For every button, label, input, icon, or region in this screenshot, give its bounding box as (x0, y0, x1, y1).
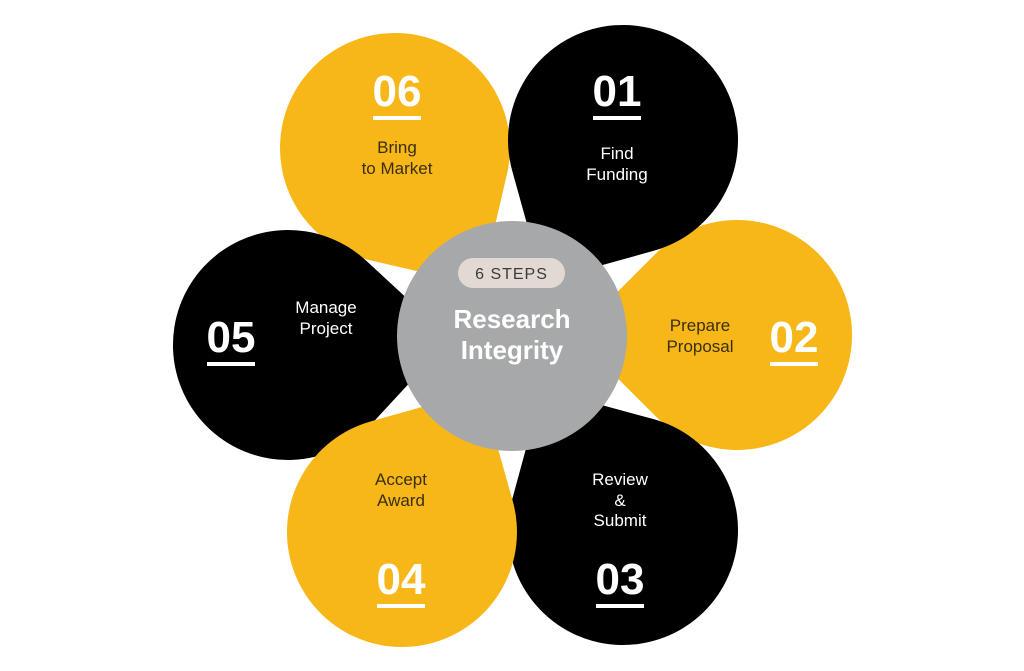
step 04: Award (377, 491, 425, 510)
petal 02 (574, 220, 852, 450)
step 03: & (614, 491, 626, 510)
step 06: to Market (362, 159, 433, 178)
petal 06 (237, 0, 579, 347)
step 01: Funding (586, 165, 648, 184)
step 04 (375, 470, 427, 608)
step 04: 04 (377, 555, 426, 604)
step 05: Project (300, 319, 353, 338)
step 03 (592, 470, 649, 608)
step 06 (362, 67, 433, 178)
center title: Integrity (461, 335, 564, 365)
step 03: Review (592, 470, 649, 489)
step 02: Proposal (666, 337, 734, 356)
step 05: 05 (207, 313, 255, 362)
petal 03 (442, 332, 780, 671)
step 03: Submit (594, 511, 647, 530)
step 01 (586, 67, 648, 184)
step 01: 01 (593, 67, 641, 116)
pill: 6 steps: 6 STEPS (475, 266, 548, 283)
step 03: 03 (596, 555, 644, 604)
pill: 6 steps (458, 258, 565, 288)
step 06: 06 (373, 67, 421, 116)
step 01: Find (600, 144, 634, 163)
step 05 (207, 298, 357, 366)
step 02: 02 (770, 313, 818, 362)
step 06: Bring (377, 138, 417, 157)
step 05: Manage (295, 298, 357, 317)
step 02: Prepare (670, 316, 730, 335)
petal 05 (168, 224, 455, 465)
step 04: Accept (375, 470, 427, 489)
petal 04 (245, 334, 582, 671)
step 02 (666, 313, 818, 366)
petal 01 (443, 0, 780, 338)
center title: Research (453, 304, 571, 334)
center circle (397, 221, 627, 451)
